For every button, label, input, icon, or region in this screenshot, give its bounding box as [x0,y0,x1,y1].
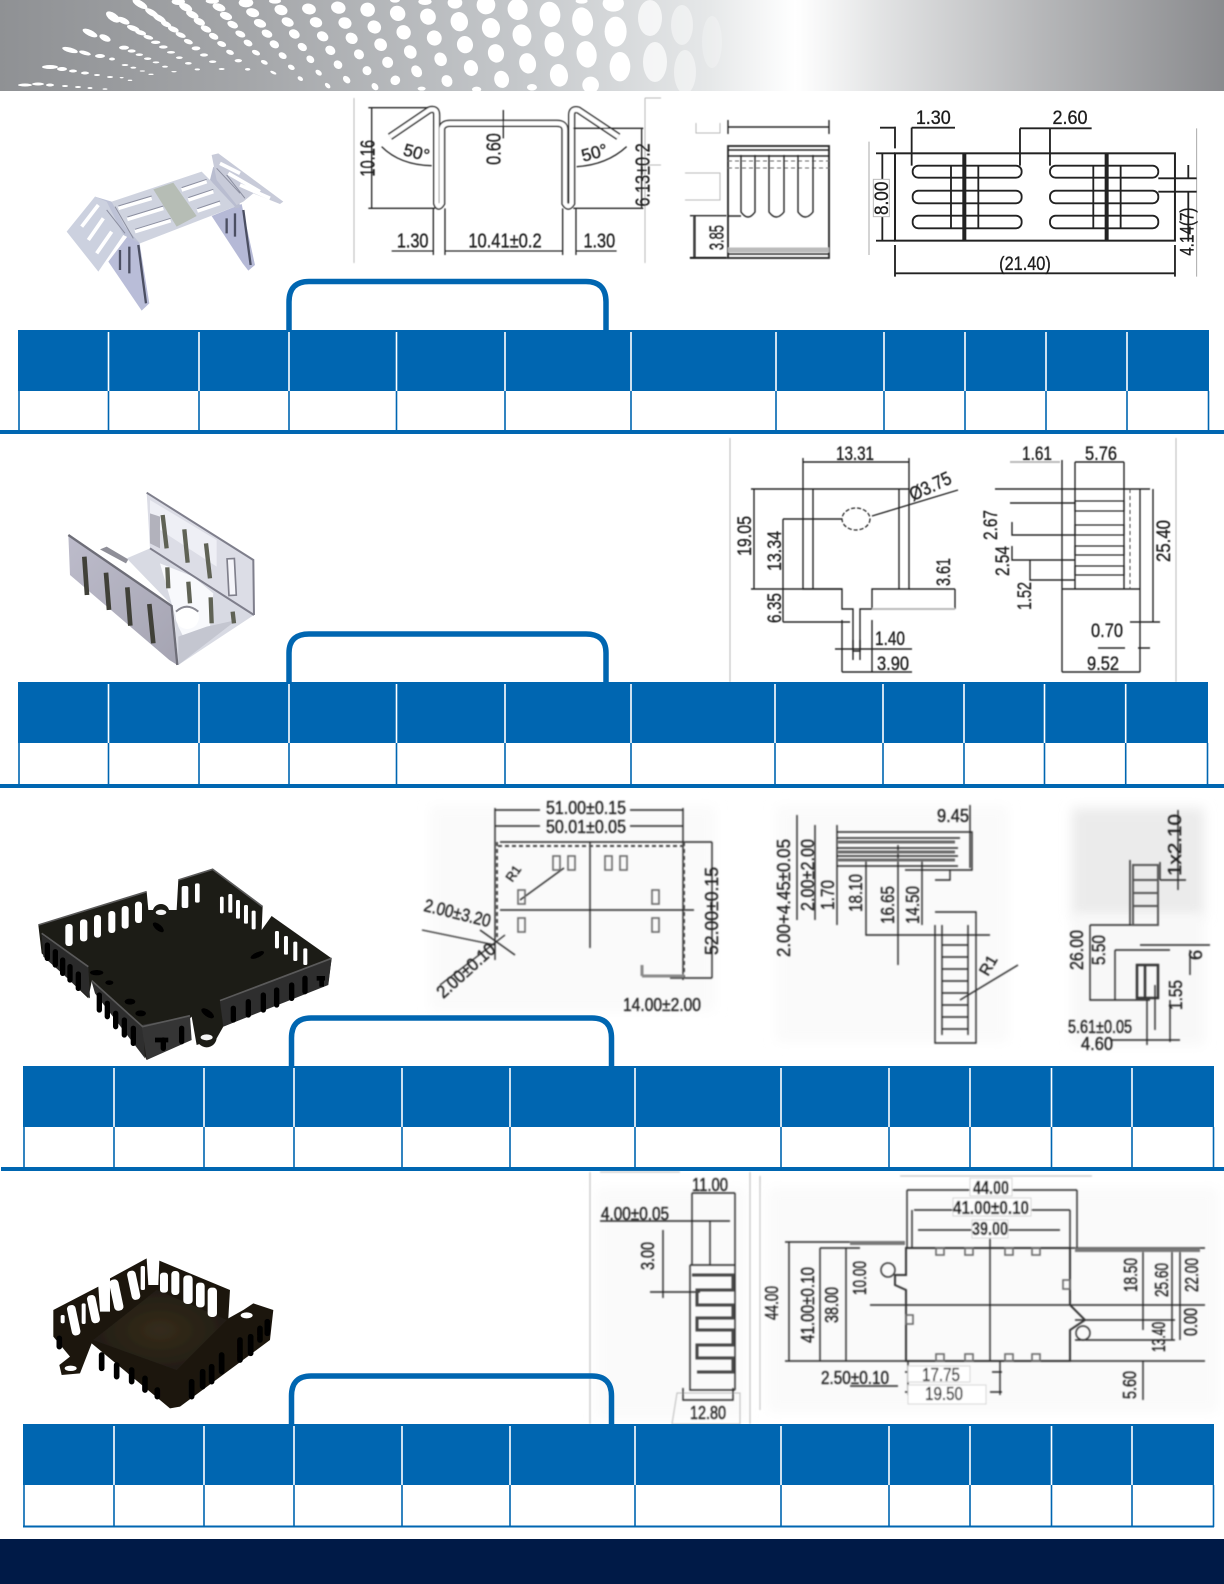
panel 4: drawing B, top view: 39.00 [972,1219,1008,1239]
panel 3: drawing B, side view: 9.45 [937,806,969,826]
panel 3: drawing C, detail view: 1.55 [1166,980,1186,1010]
panel 3: specification table [23,1066,1214,1167]
panel 3: drawing A, top view: 52.00±0.15 [702,867,722,955]
panel 3: drawing A, top view: 51.00±0.15 [546,798,626,818]
panel 2: dimension drawing: 13.34 [765,531,786,571]
panel 3: drawing C, detail view: 6 [1186,950,1206,960]
panel 2: product photo, U-shaped clip [68,493,254,665]
panel 4: drawing B, top view: 38.00 [822,1287,842,1323]
panel 4: drawing B, top view: 25.60 [1152,1263,1172,1297]
panel 4: drawing B, top view: 41.00±0.10 [953,1198,1029,1218]
panel 3: drawing A, top view: R1 [502,862,524,885]
panel 4: product photo, small black cage [53,1258,273,1408]
panel 4: drawing B, top view: 10.00 [850,1261,870,1295]
divider 3 [1,1167,1224,1171]
header banner [0,0,1224,97]
panel 4: drawing A, side view: 3.00 [638,1242,658,1270]
panel 2: dimension drawing: 19.05 [735,516,756,556]
panel 1: front view dimension drawing: 6.13±0.2 [632,143,654,207]
panel 3: drawing C, detail view: 5.50 [1089,935,1109,965]
panel 4: bracket [292,1376,612,1424]
panel 3: drawing B, side view: 2.00+4.45±0.05 [774,839,794,957]
panel 3: drawing A, top view: 50.01±0.05 [546,817,626,837]
panel 2: dimension drawing: 5.76 [1085,444,1117,465]
panel 4: drawing B, top view: 0.00 [1181,1308,1201,1336]
panel 2: dimension drawing: Ø3.75 [906,468,955,506]
panel 4: drawing B, top view: 18.50 [1121,1258,1141,1292]
panel 2: dimension drawing: 3.90 [877,654,909,675]
panel 1: flat pattern dimension drawing [869,108,1198,277]
panel 3: drawing A, top view: 2.00±3.20 [422,895,493,931]
footer bar [0,1539,1224,1584]
panel 1: front view dimension drawing: 10.16 [357,140,379,177]
panel 4: drawing A, side view [590,1172,760,1424]
panel 1: front view dimension drawing: 3.85 [706,225,728,250]
panel 1: front view dimension drawing: 1.30 [397,231,428,253]
panel 4: drawing A, side view: 4.00±0.05 [601,1204,669,1224]
panel 4: drawing B, top view [762,1176,1218,1412]
panel 1: front view dimension drawing [354,98,728,263]
panel 1: flat pattern dimension drawing: (21.40) [999,254,1051,275]
panel 3: drawing B, side view: 18.10 [846,874,866,912]
panel 2: dimension drawing: 13.31 [836,444,874,465]
panel 3: drawing A, top view [422,798,722,1015]
panel 3: drawing B, side view: 16.65 [878,886,898,924]
divider 2 [0,784,1224,788]
panel 1: front view dimension drawing: 50° [401,139,432,166]
panel 3: drawing B, side view: R1 [977,953,1002,979]
panel 3: drawing B, side view [774,805,1018,1043]
panel 4: drawing A, side view: 11.00 [692,1175,728,1195]
panel 3: drawing A, top view: 14.00±2.00 [623,995,701,1015]
panel 4: drawing B, top view: 17.75 [922,1365,960,1385]
panel 1: specification table [18,330,1209,430]
panel 3: drawing B, side view: 2.00±2.00 [798,839,818,911]
panel 4: drawing B, top view: 13.40 [1149,1322,1169,1352]
panel 1: side view dimension drawing [685,120,829,258]
panel 4: drawing B, top view: 2.50±0.10 [821,1368,889,1388]
panel 1: front view dimension drawing: 0.60 [484,133,506,165]
panel 2: dimension drawing: 6.35 [765,593,786,623]
panel 2: dimension drawing [730,438,1176,682]
panel 2: bracket [289,634,606,682]
panel 1: product photo, clip with angled flaps [67,153,283,311]
panel 2: dimension drawing: 9.52 [1087,654,1119,675]
panel 2: dimension drawing: 1.61 [1022,444,1052,465]
panel 3: drawing C, detail view: 5.61±0.05 [1068,1017,1132,1037]
panel 4: drawing B, top view: 44.00 [973,1178,1009,1198]
panel 3: drawing B, side view: 14.50 [903,886,923,924]
panel 1: flat pattern dimension drawing: 1.30 [916,108,951,129]
panel 4: drawing B, top view: 5.60 [1120,1371,1140,1399]
panel 1: front view dimension drawing: 10.41±0.2 [468,231,542,253]
banner halftone dots, fading right [638,0,722,94]
panel 1: flat pattern dimension drawing: 8.00 [872,182,893,215]
panel 2: dimension drawing: 1.40 [875,629,905,650]
panel 3: drawing A, top view: 2.00±0.10 [433,939,499,1002]
panel 2: dimension drawing: 0.70 [1091,621,1123,642]
panel 1: bracket [289,282,606,330]
panel 3: drawing B, side view: 1.70 [818,880,838,910]
panel 4: drawing B, top view: 44.00 [762,1286,782,1320]
panel 1: flat pattern dimension drawing: 2.60 [1052,108,1087,129]
panel 2: dimension drawing: 2.54 [993,546,1014,576]
divider 1 [0,430,1224,434]
panel 3: drawing C, detail view [1067,808,1210,1054]
panel 1: flat pattern dimension drawing: 4.14(7) [1177,207,1198,256]
panel 4: drawing A, side view: 12.80 [690,1403,726,1423]
panel 4: specification table [23,1424,1214,1528]
panel 4: drawing B, top view: 22.00 [1182,1258,1202,1292]
panel 2: dimension drawing: 25.40 [1154,520,1175,562]
banner halftone dots, left fan [18,9,122,90]
panel 3: drawing C, detail view: 26.00 [1067,930,1087,970]
panel 4: drawing B, top view: 41.00±0.10 [798,1267,818,1343]
panel 2: specification table [18,682,1208,784]
panel 2: dimension drawing: 2.67 [981,510,1002,540]
banner halftone dots, main field [116,0,630,93]
panel 3: drawing C, detail view: 4.60 [1081,1034,1113,1054]
panel 2: dimension drawing: 1.52 [1015,582,1036,610]
panel 4: drawing B, top view: 19.50 [925,1384,963,1404]
panel 3: bracket [292,1018,612,1066]
panel 1: front view dimension drawing: 50° [579,139,610,166]
panel 1: front view dimension drawing: 1.30 [583,231,615,253]
panel 3: drawing C, detail view: 1x2.10 [1165,814,1185,876]
panel 3: product photo, black square cage [38,869,332,1060]
panel 2: dimension drawing: 3.61 [934,558,955,586]
